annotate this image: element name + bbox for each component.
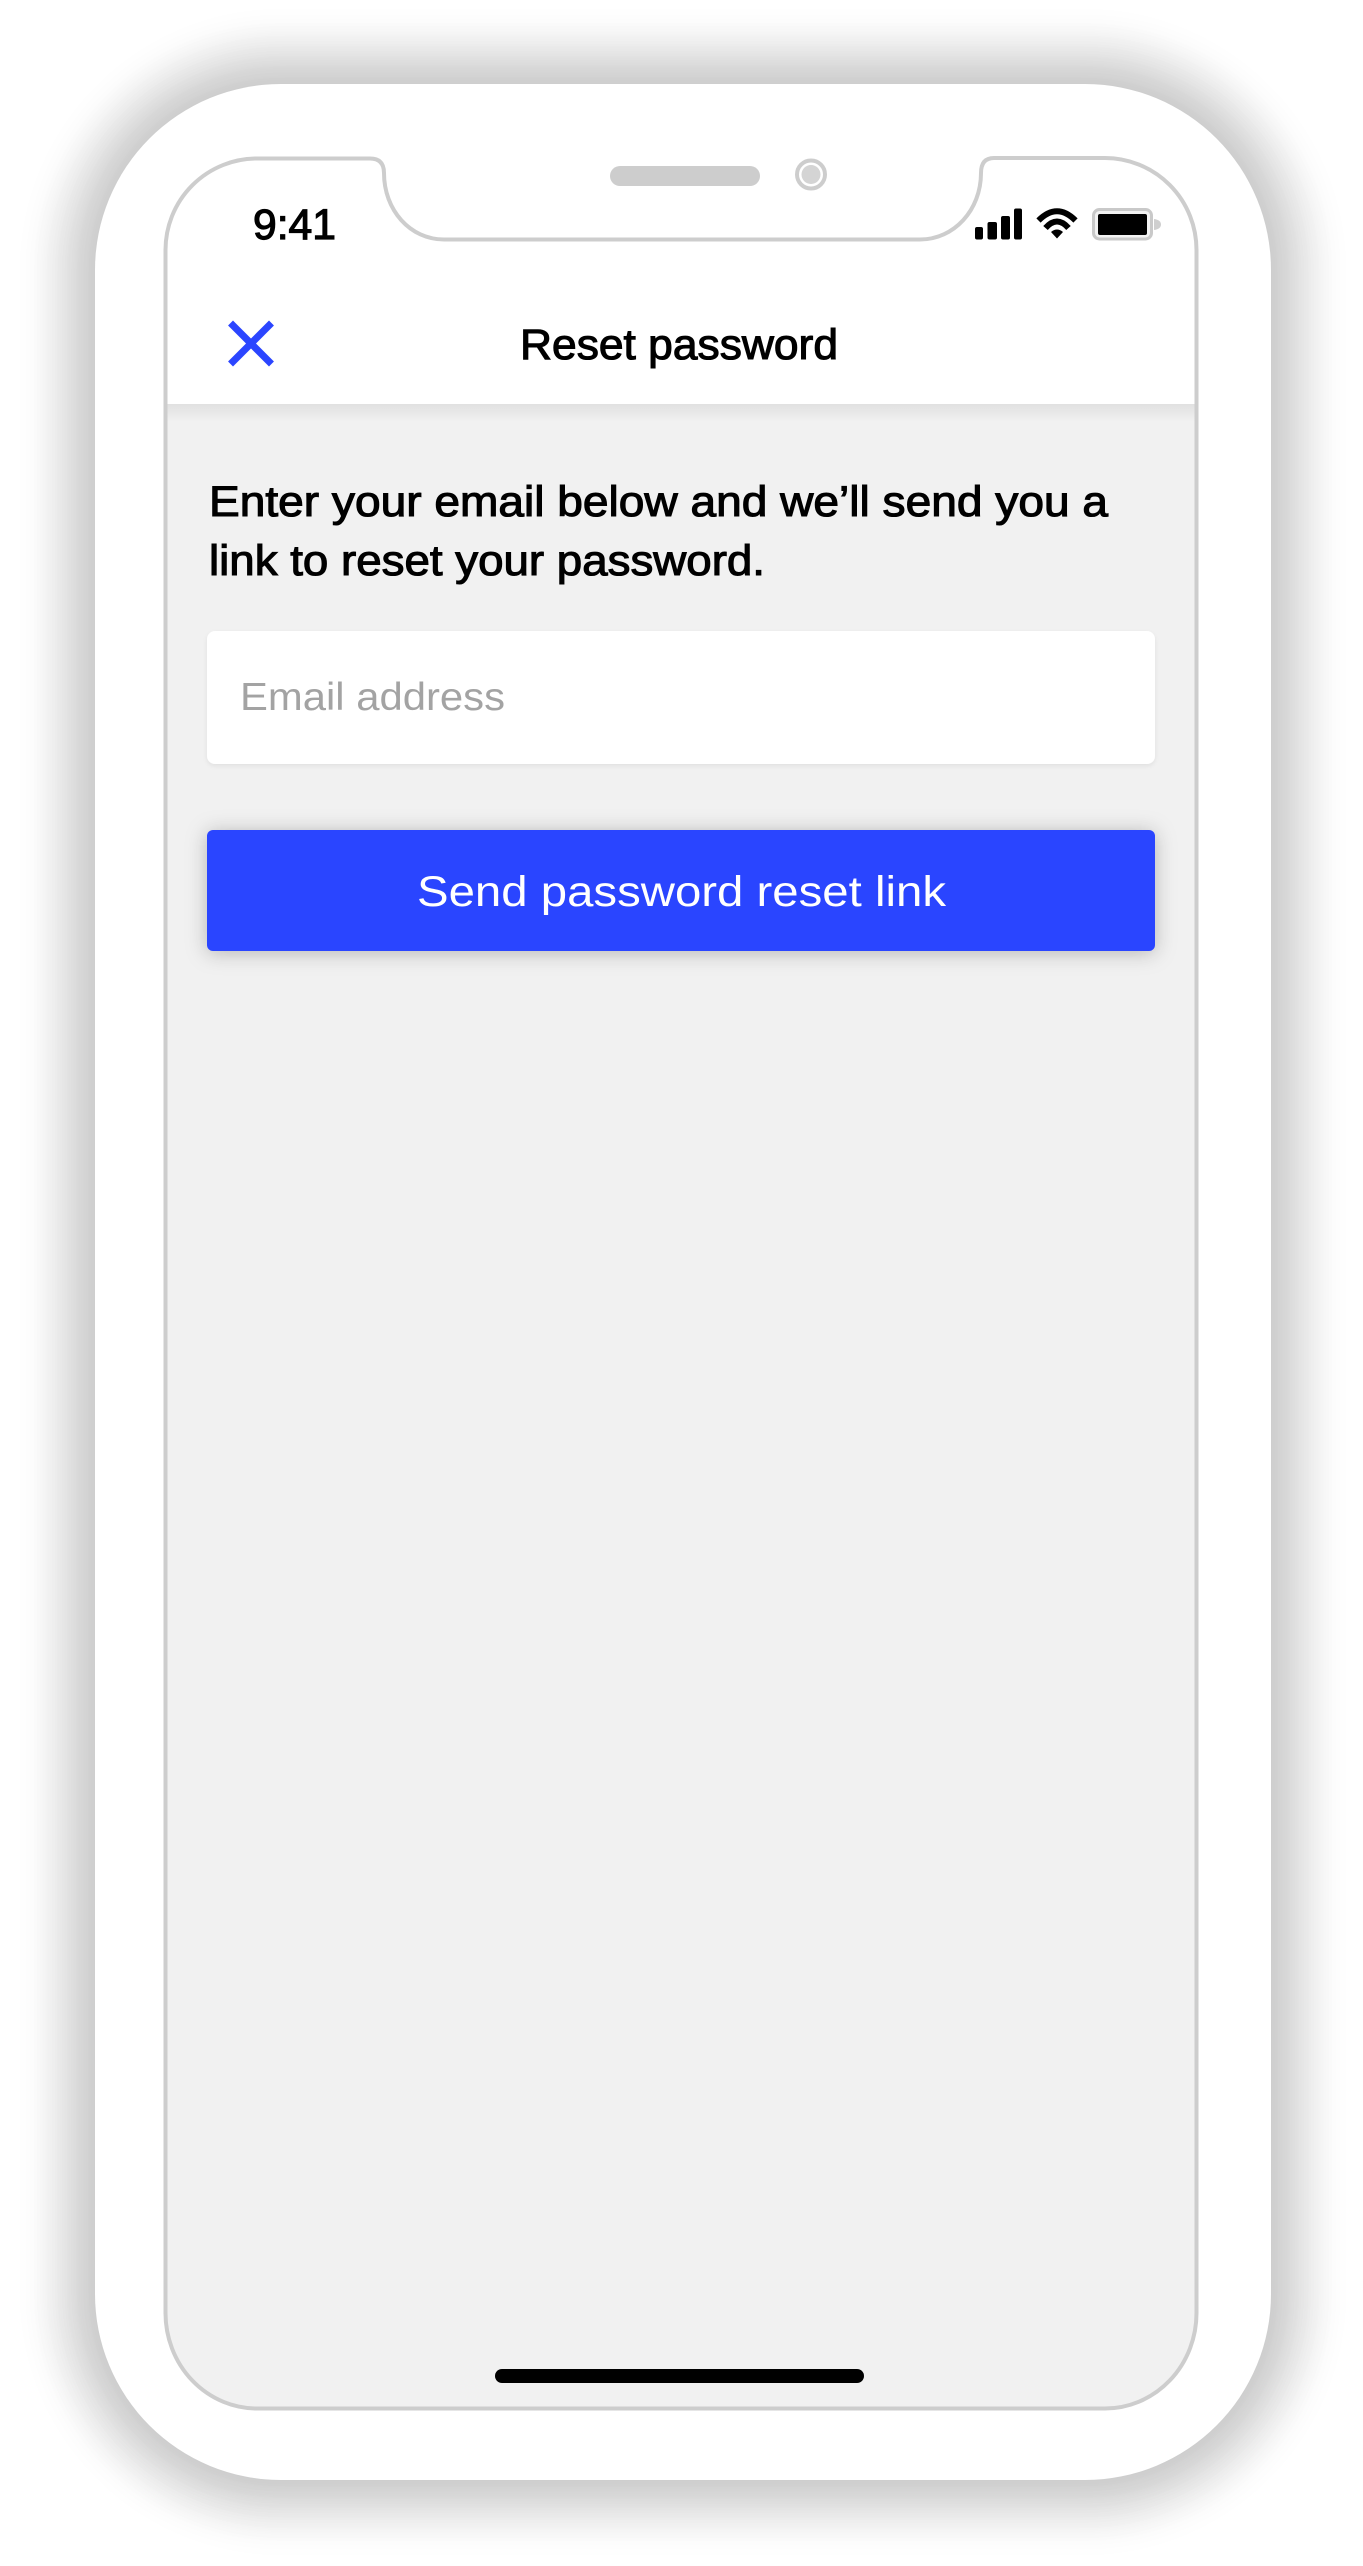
instruction text: link to reset your password.: [209, 537, 765, 585]
status bar time: 9:41: [253, 201, 336, 249]
phone screen illustration: [164, 156, 1198, 2410]
icon: signal bars: [975, 208, 1022, 240]
speaker: [610, 166, 760, 186]
screen outline with notch: [165, 158, 1196, 2408]
icon: wifi: [1038, 211, 1076, 238]
screen background: [168, 404, 1194, 2406]
input placeholder: Email address: [240, 676, 505, 719]
button label: Send password reset link: [417, 868, 947, 916]
instruction text: Enter your email below and we’ll send you a: [209, 478, 1108, 526]
email input: [207, 631, 1155, 764]
icon: battery: [1094, 210, 1161, 239]
home indicator: [495, 2369, 864, 2383]
instruction text: [209, 478, 1108, 585]
send button: [207, 830, 1155, 951]
camera: [797, 160, 825, 188]
screen title: Reset password: [520, 321, 838, 369]
icon: close X: [233, 326, 269, 362]
